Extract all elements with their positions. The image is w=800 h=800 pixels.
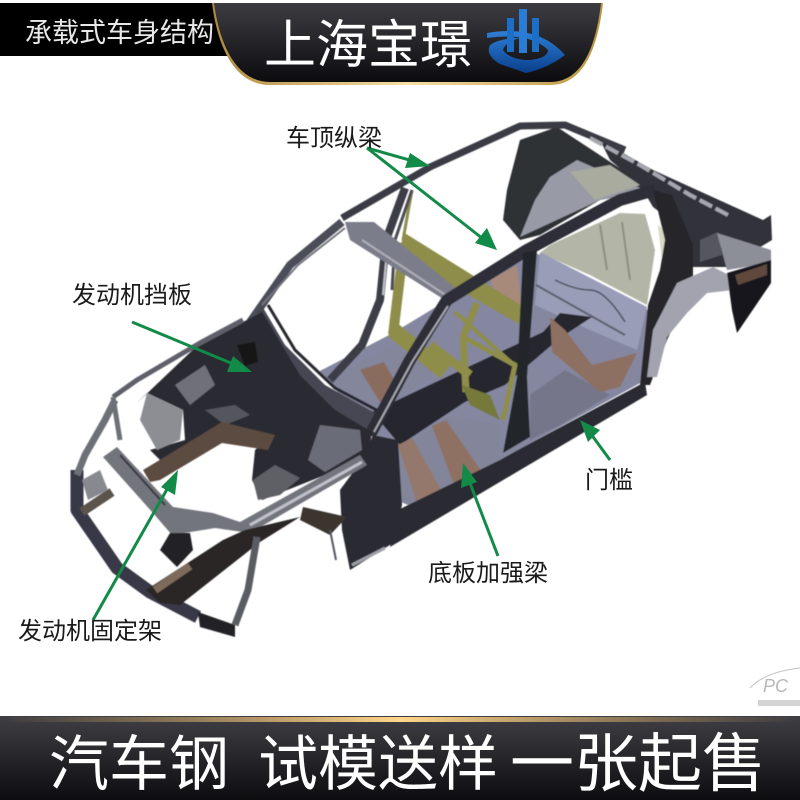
rear seat panel [540, 213, 655, 305]
arrow: firewall [132, 322, 252, 372]
rear deck dark [600, 140, 772, 267]
olive frames [393, 190, 522, 420]
rear deck light strip [590, 138, 728, 215]
C pillar and rear side dark [640, 190, 693, 385]
near B pillar [503, 250, 537, 453]
label: door sill: 门槛 [585, 467, 633, 494]
engine dome [140, 393, 183, 450]
bottom banner: 试模送样 [258, 731, 498, 798]
firewall opening [237, 342, 258, 366]
bumper frame [77, 470, 198, 617]
arrow: door sill [580, 420, 610, 460]
top-left title bar [0, 3, 230, 56]
far fender rail [113, 320, 243, 397]
label: firewall: 发动机挡板 [72, 282, 192, 309]
arrow: roof rails [367, 148, 497, 250]
label: floor reinforcement: 底板加强梁 [428, 560, 548, 587]
watermark: PC [763, 676, 789, 696]
arrow: engine mount [93, 470, 178, 620]
near sill [390, 382, 647, 547]
label: engine mount: 发动机固定架 [18, 618, 162, 645]
rear end black panel [727, 260, 771, 333]
sub frame [300, 507, 347, 535]
bottom banner: 汽车钢 [49, 731, 229, 798]
car body shell [77, 125, 772, 637]
icon: brand logo [487, 9, 565, 73]
near firewall base [340, 435, 402, 570]
rear inner wall light [520, 160, 645, 237]
bottom banner: 一张起售 [510, 728, 766, 800]
lower brace [235, 537, 257, 625]
brand name: 上海宝璟 [264, 17, 472, 75]
watermark [750, 668, 800, 706]
strut tower [253, 465, 300, 500]
brown floor beams [360, 362, 400, 402]
far pillar [330, 188, 405, 380]
radiator support upper [103, 447, 367, 535]
top-left title bar: 承载式车身结构 [25, 18, 214, 48]
central tunnel [372, 313, 592, 445]
rear end grey [717, 233, 771, 270]
near roof arc [370, 190, 655, 435]
far roof rail [342, 125, 625, 218]
floor base [318, 250, 648, 510]
arrow: floor beam [461, 463, 498, 556]
bottom banner [0, 716, 800, 800]
cowl arc [250, 306, 384, 436]
far A pillar [250, 222, 342, 322]
rear inner wall dark [503, 127, 653, 240]
windshield rear header [345, 222, 462, 302]
label: roof rail: 车顶纵梁 [286, 125, 382, 152]
rear wheel arch [647, 267, 733, 377]
lower rail [146, 517, 300, 605]
brand plate [212, 3, 603, 85]
brown engine rail [143, 422, 275, 482]
bracket [160, 533, 193, 567]
engine bay mass [137, 312, 372, 500]
